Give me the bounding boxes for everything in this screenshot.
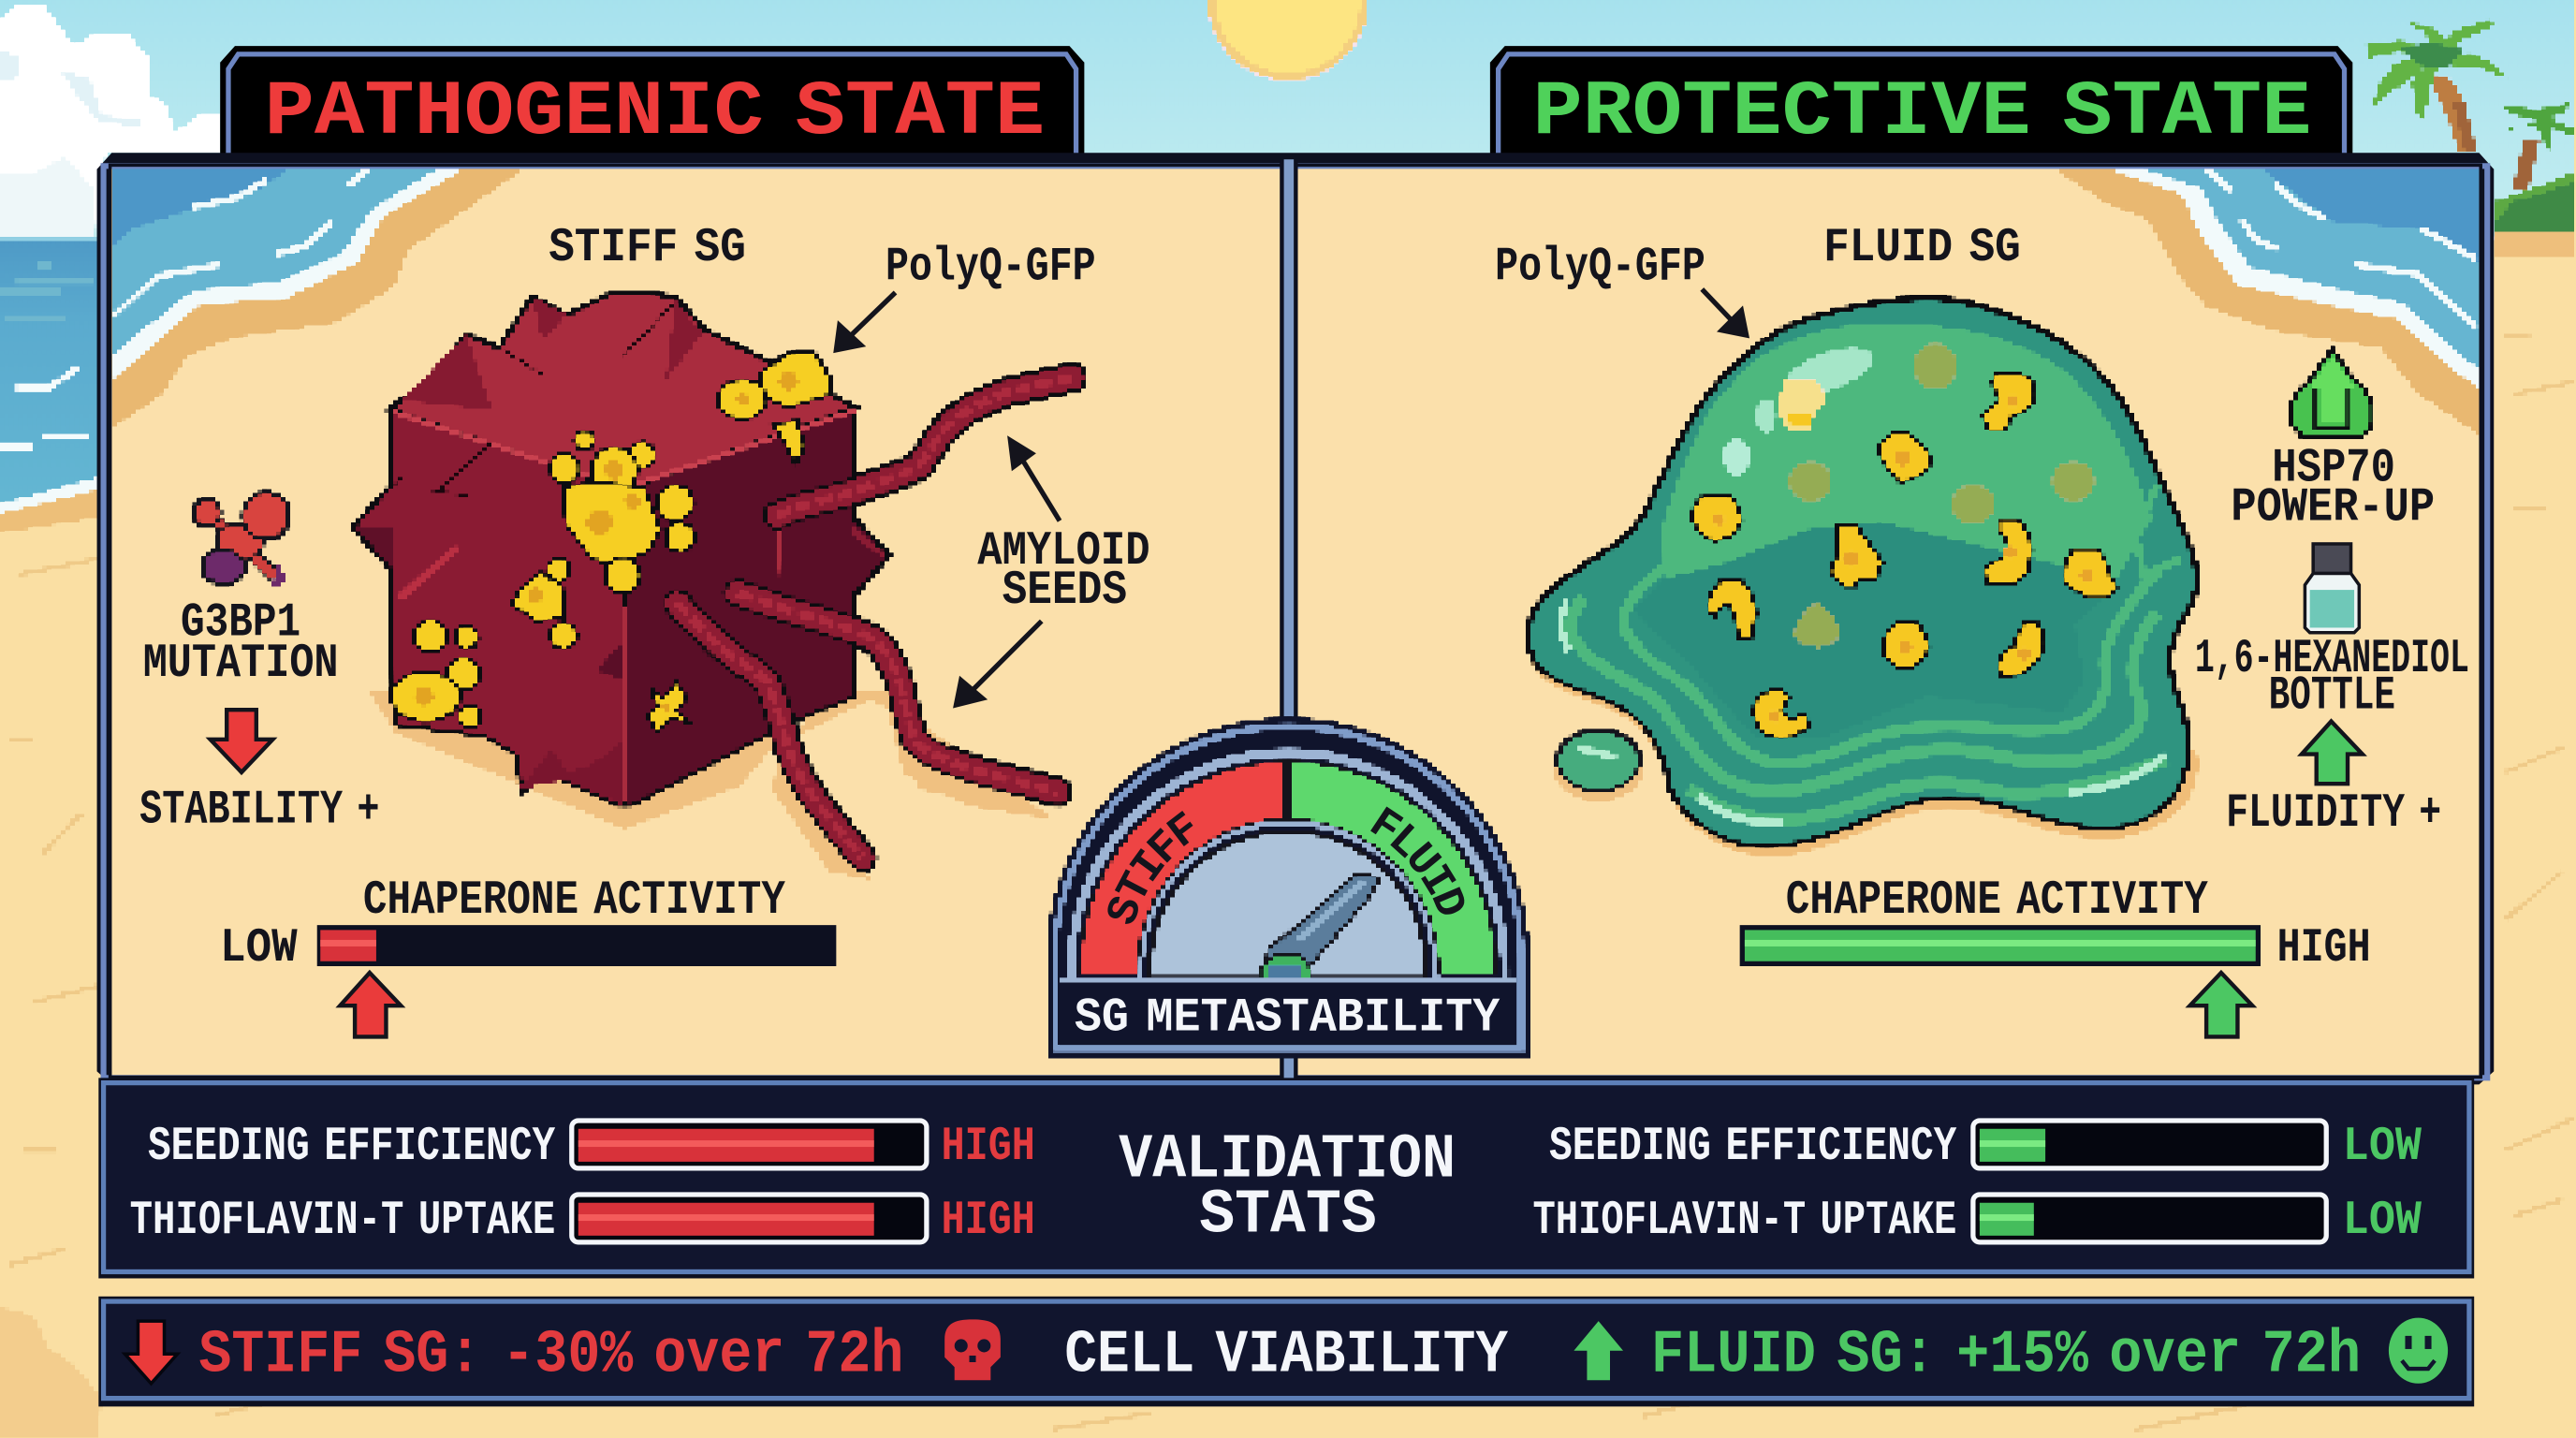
label: PolyQ-GFP right: PolyQ-GFP xyxy=(1495,241,1705,294)
fibril: middle amyloid seed xyxy=(738,594,1058,792)
heading: validation stats: VALIDATION xyxy=(1119,1125,1456,1196)
fibril: lower amyloid seed xyxy=(677,603,862,858)
label: G3BP1 mutation: MUTATION xyxy=(143,638,339,691)
chaperone activity meter: high xyxy=(1740,874,2371,976)
title tab: pathogenic state xyxy=(220,46,1084,159)
gauge: dial face xyxy=(1150,831,1426,977)
cube left face xyxy=(353,409,624,805)
label: HSP70 power-up xyxy=(2231,442,2435,536)
stat row: thioflavin-T uptake fluid: LOW xyxy=(2343,1195,2422,1248)
arrow: PolyQ-GFP right xyxy=(1702,289,1747,335)
light upper dome xyxy=(1662,324,2152,579)
panel corner: right shoreline xyxy=(2054,168,2479,433)
arrow: viability down xyxy=(124,1321,178,1384)
chaperone activity meter: low: CHAPERONE ACTIVITY xyxy=(363,874,785,928)
label: HSP70 power-up: POWER-UP xyxy=(2231,482,2435,536)
arrow: amyloid seeds down xyxy=(956,621,1042,705)
stat row: thioflavin-T uptake stiff: HIGH xyxy=(942,1195,1035,1248)
label: 1,6-hexanediol bottle: BOTTLE xyxy=(2269,669,2395,723)
background: sand ripples xyxy=(0,337,2576,1438)
heading: stiff SG: STIFF SG xyxy=(549,222,746,275)
label: amyloid seeds: SEEDS xyxy=(1003,565,1127,618)
chaperone activity meter: high: HIGH xyxy=(2277,922,2371,976)
title tab: pathogenic state: PATHOGENIC STATE xyxy=(265,68,1045,156)
gauge: SG metastability: FLUID xyxy=(1370,807,1464,915)
droplet xyxy=(1554,731,1643,800)
label: G3BP1 mutation xyxy=(143,596,339,691)
cube shadow xyxy=(370,690,1051,879)
arrow: chaperone high xyxy=(2190,973,2252,1036)
gauge: arc labels: STIFF xyxy=(1107,811,1193,924)
PolyQ-GFP faded droplets xyxy=(1789,344,2095,651)
blob shadow xyxy=(1529,314,2198,856)
arrow: chaperone low xyxy=(340,973,401,1036)
illustration: stiff stress granule cube xyxy=(353,292,1073,879)
title tab: protective state: PROTECTIVE STATE xyxy=(1533,68,2311,156)
ripple rings xyxy=(1571,485,2182,820)
label: 1,6-hexanediol bottle xyxy=(2195,633,2469,723)
heading: validation stats xyxy=(1119,1125,1456,1251)
gauge: stiff arc xyxy=(1109,790,1288,976)
label: stability +: STABILITY + xyxy=(139,784,379,837)
chaperone activity meter: high: CHAPERONE ACTIVITY xyxy=(1786,874,2208,928)
arrow: PolyQ-GFP left xyxy=(836,292,896,350)
dark lower pool xyxy=(1632,521,2110,740)
panel: cell viability xyxy=(98,1297,2474,1406)
label: fluidity +: FLUIDITY + xyxy=(2226,787,2441,841)
arrow: viability up xyxy=(1573,1321,1623,1380)
title tab: protective state xyxy=(1490,46,2352,159)
arrow: amyloid seeds up xyxy=(1010,440,1060,521)
panel corner: left shoreline xyxy=(111,168,524,427)
stat row: seeding efficiency stiff: HIGH xyxy=(942,1121,1035,1174)
center divider xyxy=(1280,159,1298,1081)
stat row: seeding efficiency stiff xyxy=(148,1121,1035,1174)
background: palm trees xyxy=(2365,18,2576,257)
cube top face xyxy=(389,292,855,490)
stat row: thioflavin-T uptake fluid xyxy=(1533,1195,2422,1248)
icon: skull xyxy=(944,1319,1001,1380)
fibril: upper amyloid seed xyxy=(777,378,1073,516)
label: amyloid seeds xyxy=(977,525,1150,618)
label: HSP70 power-up: HSP70 xyxy=(2272,442,2395,495)
background: sun xyxy=(1208,0,1368,81)
chaperone activity meter: low xyxy=(220,874,836,976)
heading: cell viability: CELL VIABILITY xyxy=(1064,1322,1508,1390)
heading: validation stats: STATS xyxy=(1199,1180,1377,1251)
PolyQ-GFP bright droplets xyxy=(1692,374,2117,738)
gauge: label xyxy=(1055,977,1521,1050)
label: amyloid seeds: AMYLOID xyxy=(977,525,1150,579)
icon: 1,6-hexanediol bottle xyxy=(2305,544,2359,633)
gauge: SG metastability xyxy=(1048,716,1530,1058)
main comparison panel xyxy=(97,153,2494,1084)
label: PolyQ-GFP left: PolyQ-GFP xyxy=(886,241,1096,294)
glossy highlights xyxy=(1561,601,2165,823)
PolyQ-GFP aggregates on cube xyxy=(391,352,831,731)
stat row: seeding efficiency fluid xyxy=(1549,1121,2422,1174)
cube right face xyxy=(624,407,889,805)
stat row: thioflavin-T uptake fluid: THIOFLAVIN-T UPTAKE xyxy=(1533,1195,1956,1248)
stat row: thioflavin-T uptake stiff: THIOFLAVIN-T UPTAKE xyxy=(130,1195,555,1248)
gauge: label: SG METASTABILITY xyxy=(1075,991,1500,1045)
stat row: thioflavin-T uptake stiff xyxy=(130,1195,1035,1248)
stat row: seeding efficiency fluid: SEEDING EFFICIENCY xyxy=(1549,1121,1957,1174)
blob body xyxy=(1529,299,2197,846)
gauge: fluid arc xyxy=(1288,790,1467,976)
arrow: fluidity up xyxy=(2302,722,2363,784)
stat row: seeding efficiency stiff: SEEDING EFFICIENCY xyxy=(148,1121,556,1174)
arrow: stability down xyxy=(211,710,272,772)
background: sea xyxy=(0,237,102,534)
panel: validation stats xyxy=(98,1078,2474,1278)
icon: smiley xyxy=(2389,1318,2448,1384)
icon: HSP70 power-up xyxy=(2291,350,2372,437)
background: clouds xyxy=(0,7,220,237)
stat row: seeding efficiency fluid: LOW xyxy=(2343,1121,2422,1174)
icon: G3BP1 mutation xyxy=(194,493,289,585)
text: fluid SG viability: FLUID SG: +15% over 72h xyxy=(1651,1322,2361,1390)
label: G3BP1 mutation: G3BP1 xyxy=(181,596,300,650)
text: stiff SG viability: STIFF SG: -30% over 72h xyxy=(198,1322,903,1390)
gauge: needle xyxy=(1260,874,1380,979)
illustration: fluid stress granule blob xyxy=(1529,299,2198,856)
chaperone activity meter: low: LOW xyxy=(220,922,298,976)
heading: fluid SG: FLUID SG xyxy=(1823,222,2021,275)
